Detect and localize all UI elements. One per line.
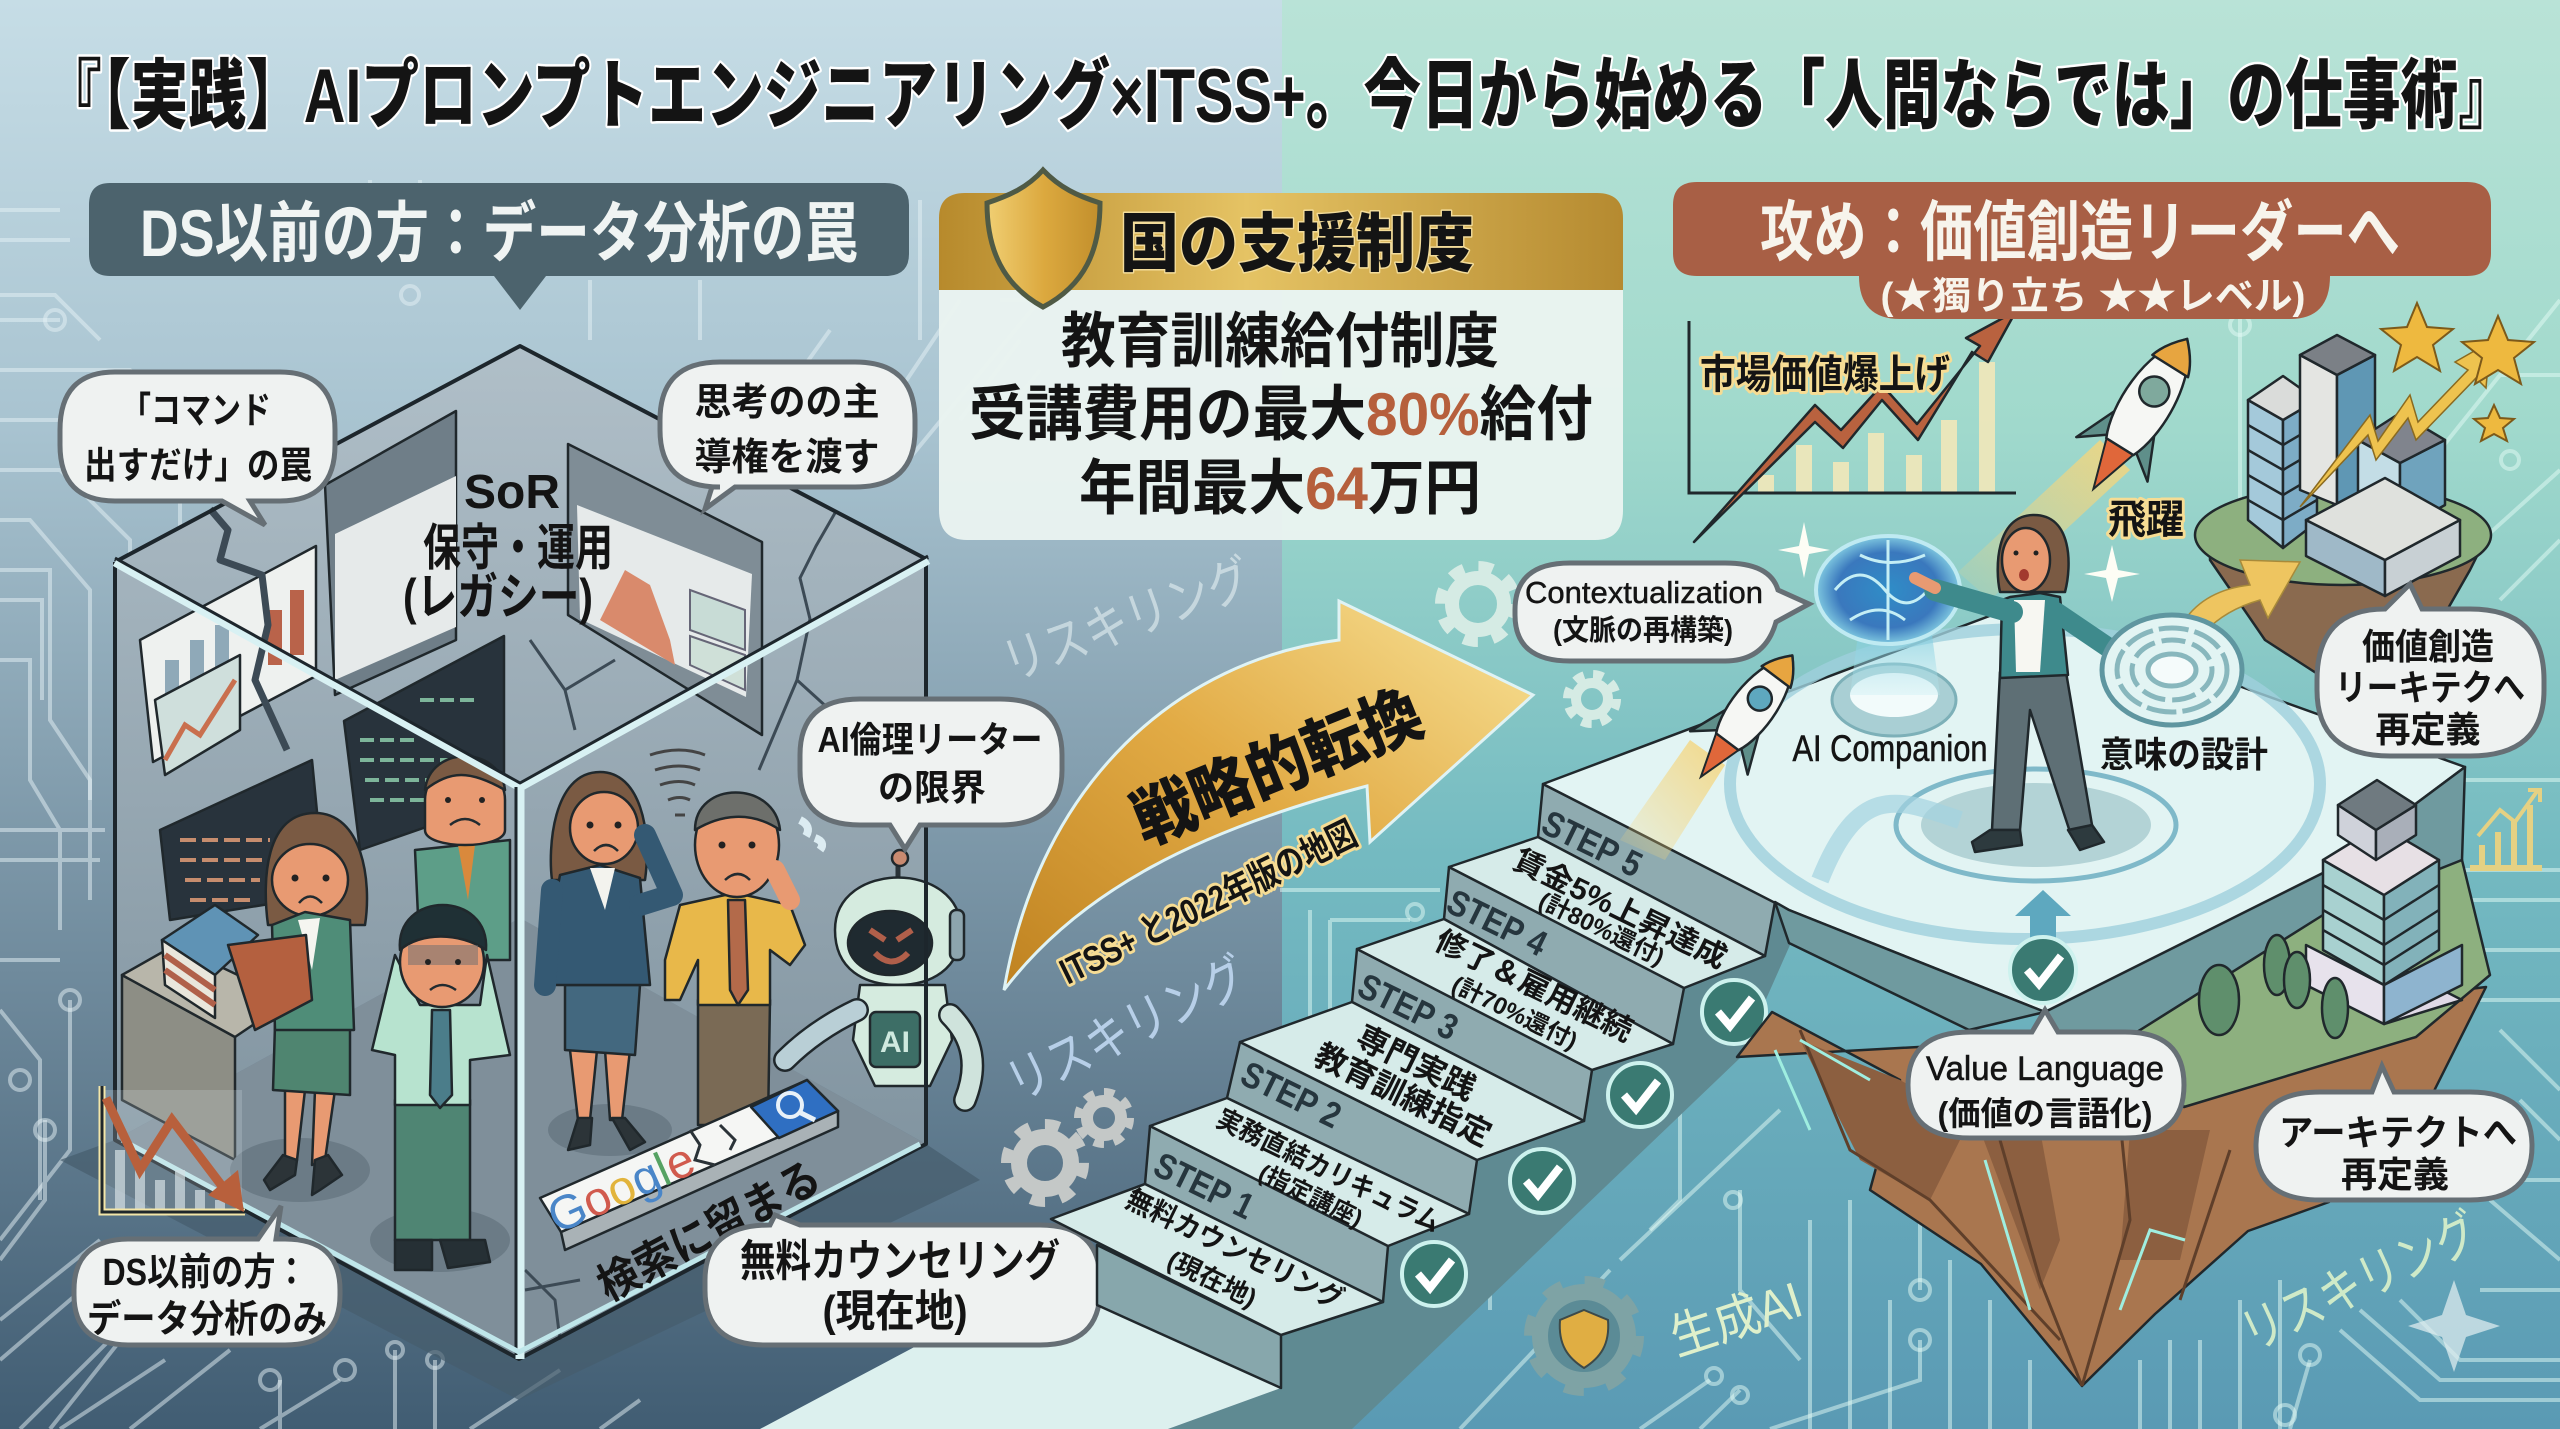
label: search stays: 検索に留まる [590,1153,829,1311]
text: flight: 飛躍 [2108,498,2184,542]
bubble: DS before: データ分析のみ [87,1298,327,1341]
icon: small gold growth chart [2470,790,2542,868]
check marks on stairs [1402,980,1766,1306]
bubble: value language: Value Language [1926,1050,2164,1088]
platform top [1543,606,2465,1012]
left header banner: DS以前の方：データ分析の罠 [140,196,858,270]
bubble: handing over thinking: 導権を渡す [694,437,880,479]
room label: SoR: SoR [464,466,560,519]
icon: gear with gold shield [1534,1286,1634,1386]
step 2: 実務直結カリキュラム [1212,1104,1445,1238]
bubble: architect: 再定義 [2341,1154,2449,1195]
icon: labyrinth disc [2102,615,2242,725]
benefit lines [969,308,1593,522]
step 5: 賃金5%上昇達成 [1508,844,1732,975]
person: woman with book [228,813,370,1202]
sparkles [1778,522,2140,602]
back right wall [520,346,928,1144]
rocket lower [1620,634,1821,860]
gold strategic arrow: ITSS+ と2022年版の地図 [1053,813,1363,992]
right header banner: (★獨り立ち ★★レベル) [1880,276,2306,318]
bubble: DS before [74,1206,340,1345]
stairs: steps with labels [1051,784,1775,1388]
person: leader woman [1915,515,2112,852]
buildings upper island [2248,335,2460,596]
bubble: command trap: 出すだけ」の罠 [84,445,312,486]
benefit lines: 受講費用の最大80%給付 [969,381,1593,448]
desk [122,945,290,1160]
text: design of meaning: 意味の設計 [2100,734,2268,775]
stairs: side wall [1097,902,1790,1429]
step 5 [1449,784,1775,988]
robot: AI [880,1026,910,1059]
bubble: AI ethics limit: の限界 [878,767,986,808]
Google wordmark: Google [540,1133,703,1244]
icon: AI brain hologram [1816,536,1960,644]
bubble: command trap: 「コマンド [121,390,271,431]
step 1: (現在地) [1163,1245,1261,1313]
bubble: value architect: 価値創造 [2362,626,2494,667]
circuit pattern: centre and right [1280,300,2560,1429]
curved yellow arrow to island [2184,560,2300,632]
room label: SoR [403,466,613,625]
floating island: upper [2195,485,2491,682]
step 1 [1051,1126,1388,1388]
bubble: architect [2256,1066,2532,1200]
step 1: STEP 1 [1148,1144,1261,1227]
right header banner [1673,182,2491,319]
room floor [115,918,926,1359]
bubble: architect: アーキテクトへ [2279,1112,2517,1153]
person: man in yellow shirt [665,792,822,1125]
left header banner [89,183,909,310]
panel: national support system [939,170,1623,540]
bubble: contextualization: Contextualization [1525,575,1763,610]
person: man behind in green jacket [415,756,510,960]
step 3 [1240,949,1592,1160]
text: reskilling lower right: リスキリング [2233,1203,2488,1363]
text: reskilling blue: リスキリング [998,947,1257,1113]
bubble: value architect: リーキテクへ [2335,667,2525,708]
step 2: (指定講座) [1254,1160,1367,1233]
icon: tornado of confusion [650,750,705,815]
bubble: free counselling current position: 無料カウンセリング [740,1237,1060,1286]
right header banner: 攻め：価値創造リーダーへ [1760,195,2400,269]
front glass edges [115,346,928,1359]
step 3: 専門実践 [1351,1019,1481,1107]
back left wall [115,346,520,1140]
text: generative AI: 生成AI [1663,1272,1809,1366]
bubble: DS before: DS以前の方： [102,1252,308,1294]
bubble: free counselling current position [705,1215,1100,1345]
bubble: command trap [60,372,335,525]
room label: SoR: 保守・運用 [423,520,613,576]
icon: gear light top [1442,568,1514,640]
bubble: AI ethics limit [800,699,1062,849]
step 4: 修了＆雇用継続 [1430,924,1638,1048]
gold strategic arrow [1004,601,1533,992]
person: man holding head [370,905,510,1272]
robot [785,850,972,1100]
platform side band [1775,767,2465,1050]
benefit lines: 年間最大64万円 [1079,455,1481,522]
rock folds and glowing veins [1775,1030,2230,1386]
bubble: handing over thinking [660,362,915,509]
search bar broken Google [540,1080,838,1250]
bubble: value architect [2317,584,2544,756]
stairs: white path to start [760,1250,1281,1429]
wall window right with charts [568,444,762,735]
monitor: code screen left [160,760,325,920]
step 2 [1150,1042,1477,1246]
bubble: AI ethics limit: AI倫理リーター [818,719,1042,760]
bubble: contextualization [1515,563,1809,661]
trees on lawn [2199,935,2348,1038]
heading: support system: 国の支援制度 [1120,208,1474,280]
background: left slate half [0,0,1282,1429]
step 5: STEP 5 [1536,802,1649,885]
step 2: STEP 2 [1235,1053,1348,1136]
swirl ring and central circle [1730,629,2320,939]
lightning arrow gold [2300,342,2490,507]
bubble: value architect: 再定義 [2376,709,2480,750]
lower island rock [1737,987,2486,1386]
text: reskilling white: リスキリング [995,549,1259,693]
bubble: free counselling current position: (現在地) [822,1287,968,1336]
step 1: 無料カウンセリング [1121,1182,1349,1316]
chart: declining arrow [102,1086,245,1212]
rocket upper [1958,317,2223,600]
step 3: 教育訓練指定 [1309,1037,1497,1153]
circuit pattern: left [0,180,1060,1429]
cracks in walls [210,509,880,1340]
tower lower right [2306,780,2462,1024]
lawn [2137,860,2490,1107]
person: woman in navy suit [540,772,672,1156]
icon: gear grey small [1079,1093,1129,1143]
step 5: (計80%還付) [1534,887,1668,971]
icon: sparkle lower right [2408,1280,2500,1372]
stars [2381,303,2534,441]
hologram pedestal [1832,620,1956,736]
left wall chart board [140,546,316,775]
chart: market value [1689,311,2016,542]
step 4: (計70%還付) [1447,971,1581,1055]
background: right teal half [1282,0,2560,1429]
benefit lines: 教育訓練給付制度 [1061,308,1499,375]
bubble: handing over thinking: 思考のの主 [694,382,880,424]
stack of books [162,905,258,1018]
check mark with up arrow on platform [2010,890,2076,1003]
step 3: STEP 3 [1352,965,1465,1048]
gold strategic arrow: 戦略的転換 [1122,676,1433,859]
room label: SoR: (レガシー) [403,569,593,625]
monitor: code screen back [344,636,504,850]
panel: left glass room [60,346,980,1400]
wall window left [325,411,456,695]
icon: gear grey large [1008,1126,1082,1200]
step 4: STEP 4 [1441,881,1554,964]
bubble: value language: (価値の言語化) [1938,1095,2152,1132]
bubble: contextualization: (文脈の再構築) [1553,614,1733,647]
step 4 [1357,867,1684,1070]
icon: gear light small [1568,675,1616,723]
bubble: value language [1908,1010,2184,1138]
text: AI Companion: AI Companion [1792,728,1988,769]
chart: market value: 市場価値爆上げ [1700,353,1950,397]
icon: gold shield [987,170,1100,307]
